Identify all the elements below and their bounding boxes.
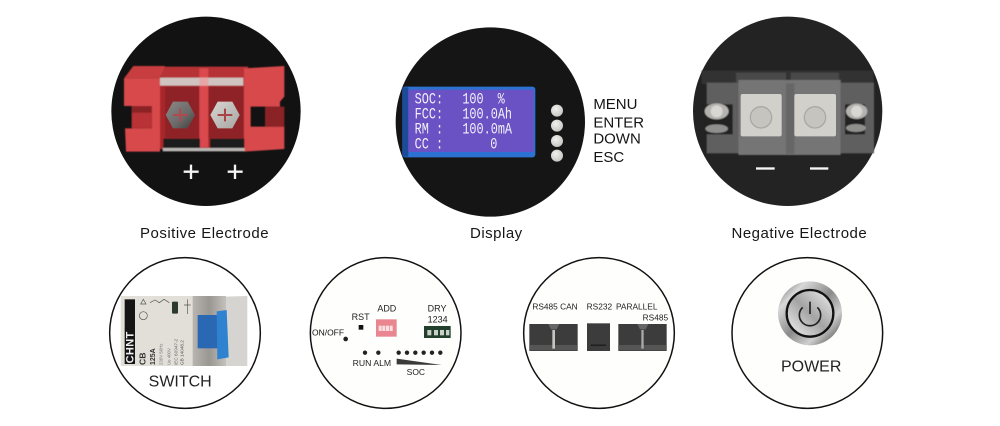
- lcd readout: %: [498, 91, 505, 109]
- breaker specification text: IEC 60947-2: [174, 338, 179, 365]
- port labels: RS485 CAN: [532, 301, 578, 311]
- left bolt: [166, 102, 195, 128]
- port labels: RS485: [643, 313, 668, 323]
- dry contact terminal: [424, 304, 451, 338]
- breaker specification text: Ue 400V: [167, 348, 172, 365]
- run and alm leds: RUN ALM: [353, 358, 391, 368]
- parallel rs485 ports: [618, 324, 667, 351]
- lcd left edge: [402, 87, 408, 157]
- port labels: [532, 301, 668, 323]
- panel: power: [732, 258, 883, 408]
- button labels: MENU: [593, 96, 637, 113]
- lcd screen frame: [402, 87, 535, 157]
- rs232 port: [587, 323, 610, 351]
- plus sign left: [184, 165, 199, 179]
- button labels: ESC: [593, 149, 624, 166]
- breaker specification text: 125A: [150, 348, 157, 365]
- brand logo: CHNT: [124, 331, 136, 363]
- indicator window: [172, 302, 178, 314]
- heading: display: Display: [470, 225, 523, 242]
- add dip switch: ADD: [377, 304, 397, 314]
- lcd readout: CC :: [415, 136, 443, 154]
- power button: [778, 281, 842, 345]
- lcd readout: FCC:: [415, 106, 443, 124]
- panel: indicators: [310, 258, 461, 408]
- circle outline: [110, 258, 260, 408]
- minus sign right: [810, 167, 828, 170]
- circle outline: [524, 258, 674, 408]
- add dip switch: [376, 304, 397, 337]
- run and alm leds: [353, 350, 391, 368]
- panel: positive electrode: [111, 17, 301, 206]
- breaker specification text: [138, 338, 185, 365]
- heading: negative electrode: Negative Electrode: [732, 225, 867, 242]
- lcd readout: [415, 91, 513, 154]
- panel: communication ports: [524, 258, 674, 408]
- right bolt: [210, 102, 240, 128]
- brand logo: [124, 299, 136, 364]
- soc leds and wedge: [396, 350, 442, 377]
- button labels: ENTER: [593, 114, 644, 131]
- breaker body: [121, 296, 196, 366]
- heading: positive electrode: Positive Electrode: [140, 225, 269, 242]
- power label: POWER: [781, 359, 841, 376]
- lcd readout: 100: [462, 91, 484, 109]
- switch label: SWITCH: [149, 374, 212, 391]
- port labels: RS232: [587, 301, 612, 311]
- dark circular background: [693, 17, 882, 206]
- black circular background: [396, 27, 585, 217]
- port labels: PARALLEL: [616, 301, 658, 311]
- panel: display: [396, 27, 644, 217]
- black circular photo background: [111, 17, 301, 206]
- button labels: [593, 96, 644, 166]
- breaker specification text: GB 14048.2: [180, 340, 185, 365]
- rst label and button: RST: [352, 312, 370, 322]
- dry contact terminal: 1234: [428, 315, 448, 325]
- breaker symbols: [139, 299, 191, 320]
- lcd readout: 100.0mA: [462, 121, 513, 139]
- left terminal square: [741, 94, 782, 136]
- breaker specification text: 230V 50Hz: [159, 344, 164, 365]
- blue toggle: [198, 310, 229, 359]
- lcd readout: 0: [490, 136, 497, 154]
- breaker specification text: CB: [138, 352, 148, 365]
- lcd readout: 100.0Ah: [462, 106, 512, 124]
- gray terminal block: [702, 71, 874, 155]
- panel: switch: [110, 258, 260, 408]
- rs485 can ports: [529, 324, 578, 351]
- red terminal block: [124, 66, 284, 152]
- on/off label and button: ON/OFF: [312, 328, 344, 338]
- button labels: DOWN: [593, 131, 641, 148]
- lcd readout: RM :: [415, 121, 443, 139]
- circle outline: [310, 258, 461, 408]
- lcd purple area: [408, 90, 534, 152]
- soc leds and wedge: SOC: [407, 367, 425, 377]
- breaker handle housing: [193, 296, 226, 366]
- right terminal square: [794, 94, 836, 136]
- on/off label and button: [312, 328, 348, 341]
- dry contact terminal: DRY: [428, 304, 446, 314]
- plus sign right: [228, 165, 243, 179]
- minus sign left: [756, 167, 775, 170]
- lcd readout: SOC:: [415, 91, 443, 109]
- circle outline: [732, 258, 883, 408]
- breaker right section: [226, 296, 247, 366]
- rst label and button: [352, 312, 370, 330]
- buttons: [551, 105, 563, 162]
- panel: negative electrode: [693, 17, 882, 206]
